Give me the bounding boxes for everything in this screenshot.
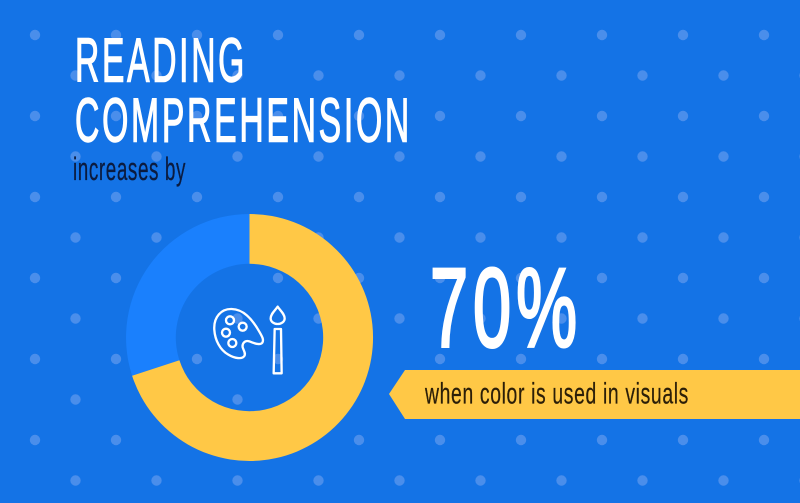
title: COMPREHENSION <box>75 86 412 156</box>
donut segment: 70% <box>132 214 373 461</box>
icon: palette and paintbrush <box>214 307 285 373</box>
icon: palette <box>214 309 263 358</box>
subtitle: increases by <box>73 151 186 187</box>
icon: paintbrush <box>271 307 285 373</box>
donut segment: remaining 30% <box>126 214 250 376</box>
title: READING <box>75 26 247 96</box>
title <box>75 26 412 156</box>
banner shape <box>389 370 800 419</box>
statistic: 70%: 70% <box>430 246 582 370</box>
banner <box>389 370 800 419</box>
donut chart <box>126 214 373 461</box>
